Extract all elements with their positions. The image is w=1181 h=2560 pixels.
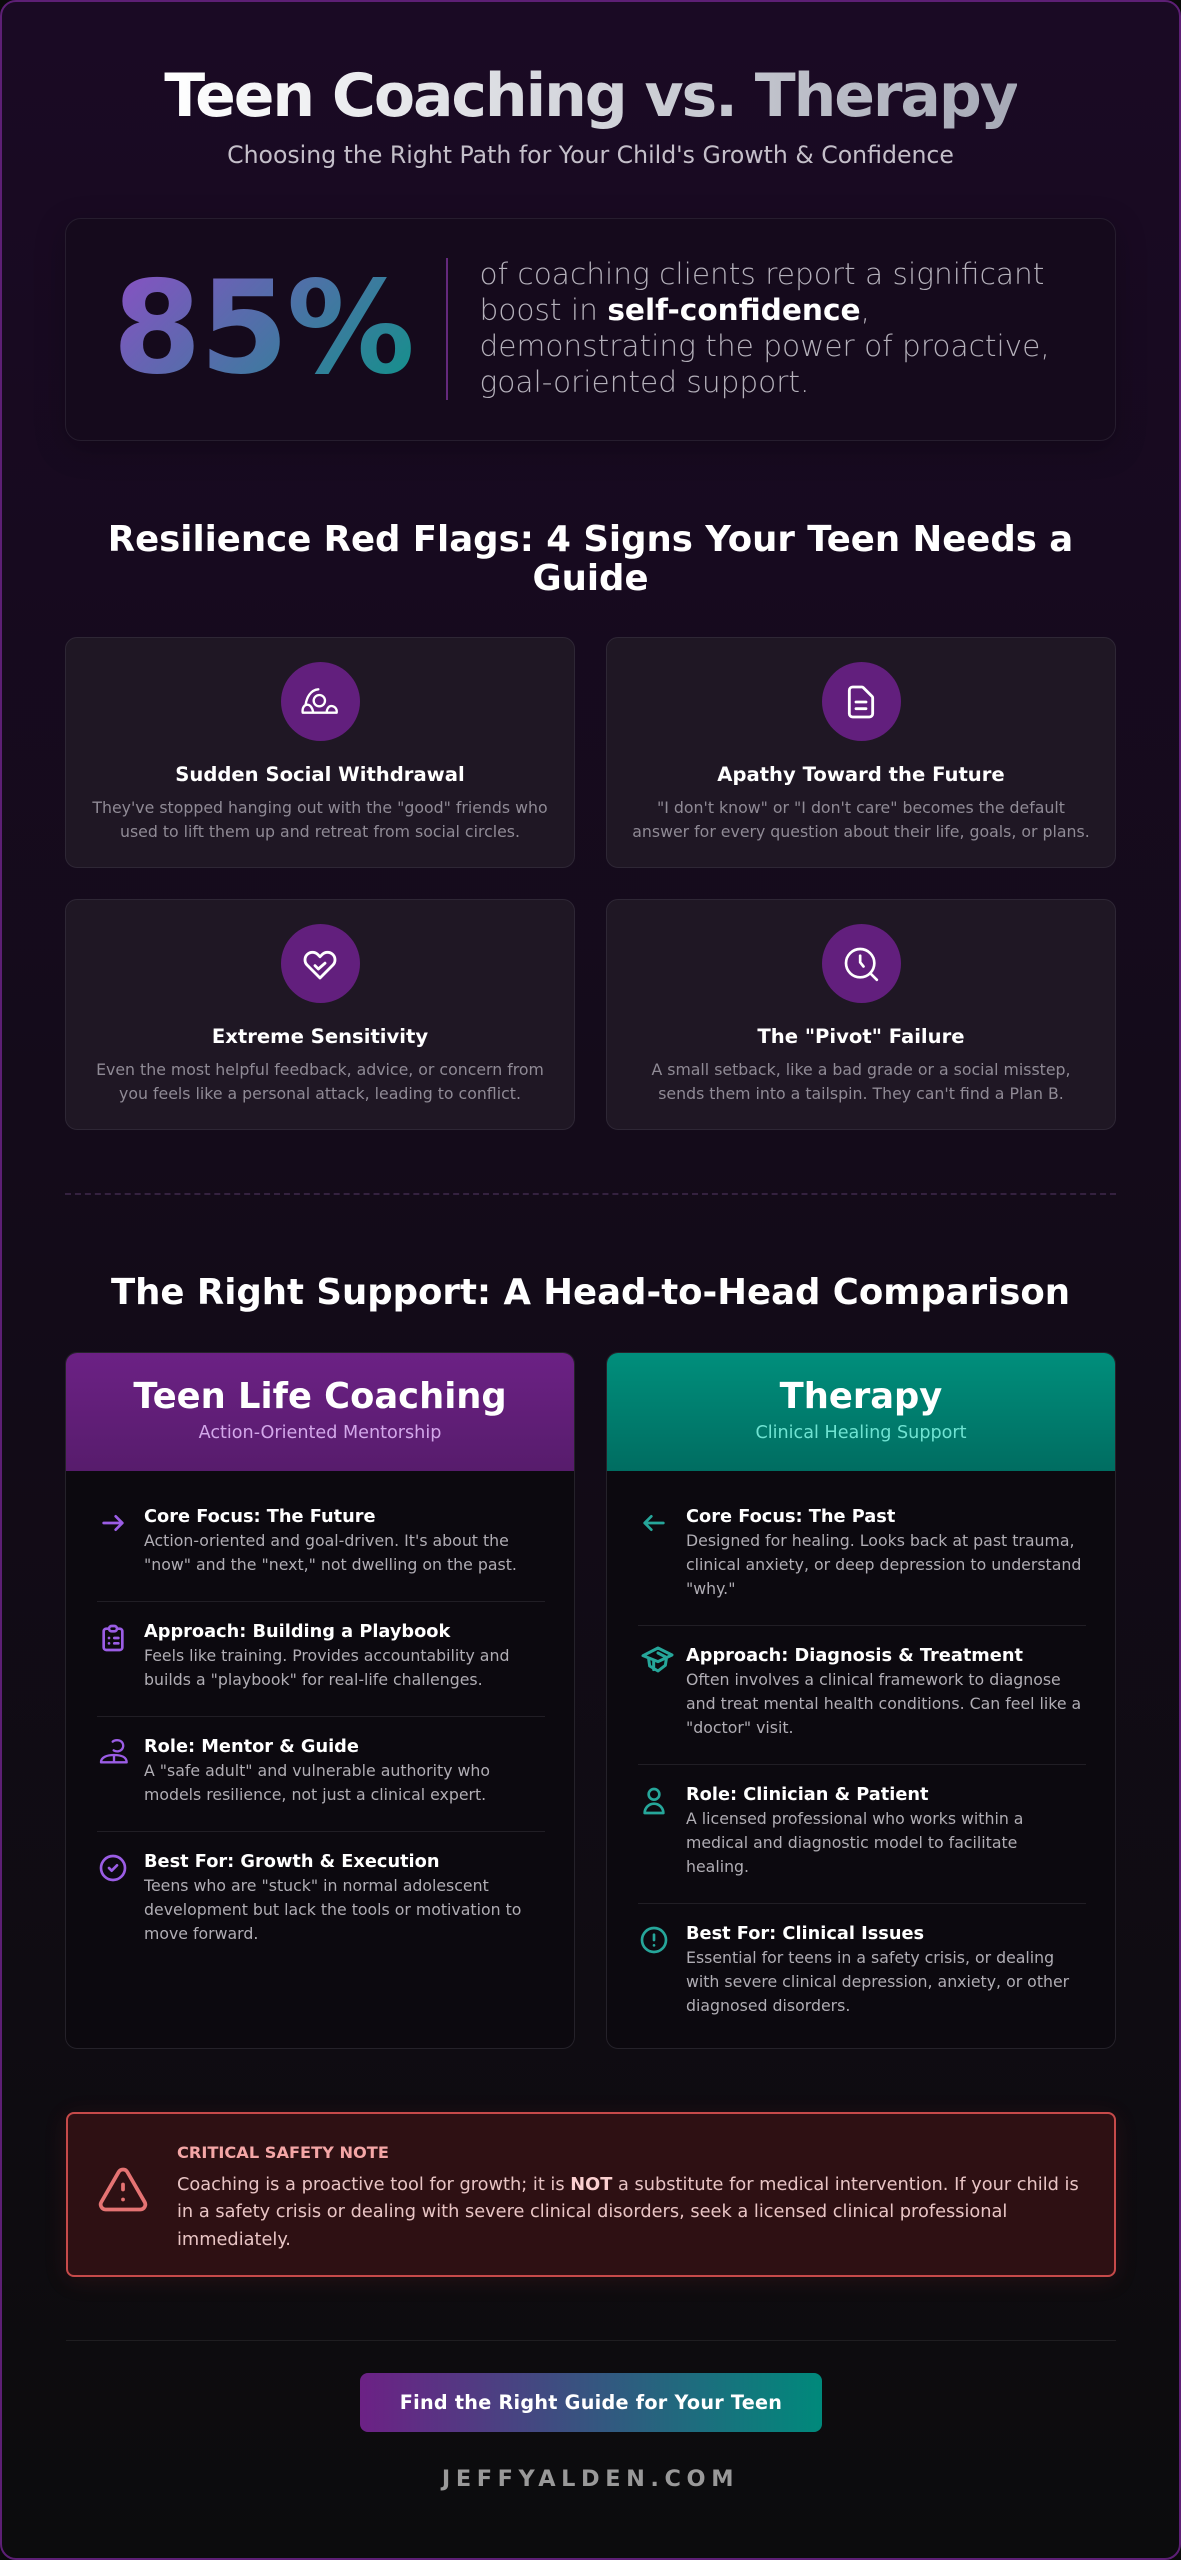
item text — [144, 1876, 521, 1943]
item title: Approach: Diagnosis & Treatment — [686, 1646, 1023, 1666]
item text: builds a "playbook" for real-life challenges. — [144, 1670, 483, 1689]
item text: Action-oriented and goal-driven. It's about the — [144, 1531, 509, 1550]
alert title: CRITICAL SAFETY NOTE — [177, 2143, 389, 2162]
alert text — [177, 2174, 1079, 2250]
icon: clock search — [822, 924, 900, 1003]
item text: development but lack the tools or motivation to — [144, 1900, 521, 1919]
therapy title: Therapy — [780, 1376, 942, 1417]
coaching subtitle: Action-Oriented Mentorship — [199, 1423, 441, 1443]
callout: critical safety note — [66, 2112, 1116, 2277]
coaching header — [65, 1352, 575, 1471]
card text — [96, 1060, 544, 1103]
item text — [144, 1646, 509, 1689]
panel: therapy — [606, 1352, 1116, 2049]
card: apathy toward the future — [606, 637, 1116, 868]
item text: A licensed professional who works within a — [686, 1809, 1023, 1828]
item text: A "safe adult" and vulnerable authority who — [144, 1761, 490, 1780]
card text: used to lift them up and retreat from social circles. — [120, 822, 520, 841]
icon: heart check — [280, 924, 360, 1003]
card text — [92, 798, 548, 841]
card: sudden social withdrawal — [65, 637, 575, 868]
item title: Role: Clinician & Patient — [686, 1784, 928, 1804]
icon: clipboard — [102, 1624, 124, 1652]
icon: person — [643, 1788, 665, 1814]
stat description — [480, 257, 1050, 399]
item text: and treat mental health conditions. Can feel like a — [686, 1694, 1081, 1713]
item text: healing. — [686, 1857, 749, 1876]
card text — [651, 1060, 1071, 1103]
item title: Core Focus: The Past — [686, 1506, 895, 1526]
button: call to action — [360, 2373, 822, 2432]
stat description: goal-oriented support. — [480, 365, 809, 399]
alert text: immediately. — [177, 2230, 291, 2250]
card title: Extreme Sensitivity — [212, 1025, 428, 1048]
item text: move forward. — [144, 1924, 258, 1943]
item: role — [100, 1736, 490, 1804]
item text — [686, 1809, 1023, 1876]
icon: exclamation circle — [640, 1926, 668, 1954]
item text: Often involves a clinical framework to diagnose — [686, 1670, 1061, 1689]
icon: warning triangle — [98, 2168, 148, 2212]
card text: answer for every question about their life, goals, or plans. — [632, 822, 1090, 841]
item text: with severe clinical depression, anxiety, or other — [686, 1972, 1069, 1991]
item text — [686, 1531, 1081, 1598]
card text: They've stopped hanging out with the "good" friends who — [92, 798, 548, 817]
item: approach — [102, 1622, 509, 1689]
item text: medical and diagnostic model to facilitate — [686, 1833, 1017, 1852]
item text — [686, 1948, 1070, 2015]
icon: mentor — [100, 1739, 128, 1764]
item text: "why." — [686, 1579, 735, 1598]
item: role — [643, 1784, 1023, 1876]
item text: Teens who are "stuck" in normal adolescent — [144, 1876, 489, 1895]
item title: Best For: Clinical Issues — [686, 1924, 924, 1944]
therapy subtitle: Clinical Healing Support — [755, 1423, 967, 1443]
item: core focus — [643, 1506, 1081, 1598]
item text: "now" and the "next," not dwelling on the past. — [144, 1555, 517, 1574]
button: call to action: Find the Right Guide for Your Teen — [400, 2391, 782, 2414]
title: Teen Coaching vs. Therapy — [164, 60, 1017, 130]
item title: Approach: Building a Playbook — [144, 1622, 450, 1642]
item text: Designed for healing. Looks back at past trauma, — [686, 1531, 1074, 1550]
item title: Role: Mentor & Guide — [144, 1736, 359, 1756]
item: best for — [100, 1852, 521, 1943]
stat description: of coaching clients report a significant — [480, 257, 1044, 291]
item text — [686, 1670, 1081, 1737]
heading: comparison: The Right Support: A Head-to-Head Comparison — [111, 1272, 1070, 1313]
stat description: boost in self-confidence, — [480, 293, 870, 327]
coaching title: Teen Life Coaching — [133, 1376, 507, 1417]
item text: models resilience, not just a clinical expert. — [144, 1785, 486, 1804]
card: extreme sensitivity — [65, 899, 575, 1130]
icon: document — [822, 662, 900, 741]
stat divider — [446, 258, 448, 400]
stat description: demonstrating the power of proactive, — [480, 329, 1050, 363]
heading: red flags: Resilience Red Flags: 4 Signs Your Teen Needs a — [108, 519, 1073, 560]
item: best for — [640, 1924, 1070, 2015]
item text — [144, 1531, 517, 1574]
icon: arrow left — [643, 1514, 665, 1532]
card text: you feels like a personal attack, leading to conflict. — [119, 1084, 521, 1103]
item text: Essential for teens in a safety crisis, or dealing — [686, 1948, 1054, 1967]
icon: check circle — [100, 1854, 126, 1882]
card title: Apathy Toward the Future — [717, 763, 1005, 786]
item: approach — [641, 1646, 1081, 1737]
item text: Feels like training. Provides accountability and — [144, 1646, 509, 1665]
item title: Best For: Growth & Execution — [144, 1852, 439, 1872]
icon: graduation cap — [641, 1646, 674, 1672]
card: pivot failure — [606, 899, 1116, 1130]
footer brand: JEFFYALDEN.COM — [442, 2466, 739, 2492]
icon: arrow right — [102, 1514, 124, 1532]
panel: teen life coaching — [65, 1352, 575, 2049]
card text: sends them into a tailspin. They can't find a Plan B. — [658, 1084, 1064, 1103]
card title: Sudden Social Withdrawal — [175, 763, 465, 786]
card text: "I don't know" or "I don't care" becomes the default — [657, 798, 1065, 817]
item text: diagnosed disorders. — [686, 1996, 850, 2015]
card text: Even the most helpful feedback, advice, or concern from — [96, 1060, 544, 1079]
panel: key statistic — [65, 218, 1116, 441]
icon: people — [280, 662, 360, 741]
subtitle: Choosing the Right Path for Your Child's Growth & Confidence — [227, 141, 954, 169]
item: core focus — [102, 1506, 517, 1574]
item text: clinical anxiety, or deep depression to understand — [686, 1555, 1081, 1574]
big number 85%: 85% — [112, 254, 413, 403]
item text: "doctor" visit. — [686, 1718, 794, 1737]
alert text: in a safety crisis or dealing with severe clinical disorders, seek a licensed clinical professional — [177, 2202, 1007, 2222]
alert text: Coaching is a proactive tool for growth; it is NOT a substitute for medical intervention. If your child is — [177, 2174, 1079, 2194]
therapy header — [606, 1352, 1116, 1471]
heading: red flags — [108, 519, 1073, 599]
item text — [144, 1761, 490, 1804]
heading: red flags: Guide — [532, 558, 649, 599]
card text: A small setback, like a bad grade or a social misstep, — [651, 1060, 1071, 1079]
item title: Core Focus: The Future — [144, 1506, 376, 1526]
card text — [632, 798, 1090, 841]
card title: The "Pivot" Failure — [757, 1025, 965, 1048]
